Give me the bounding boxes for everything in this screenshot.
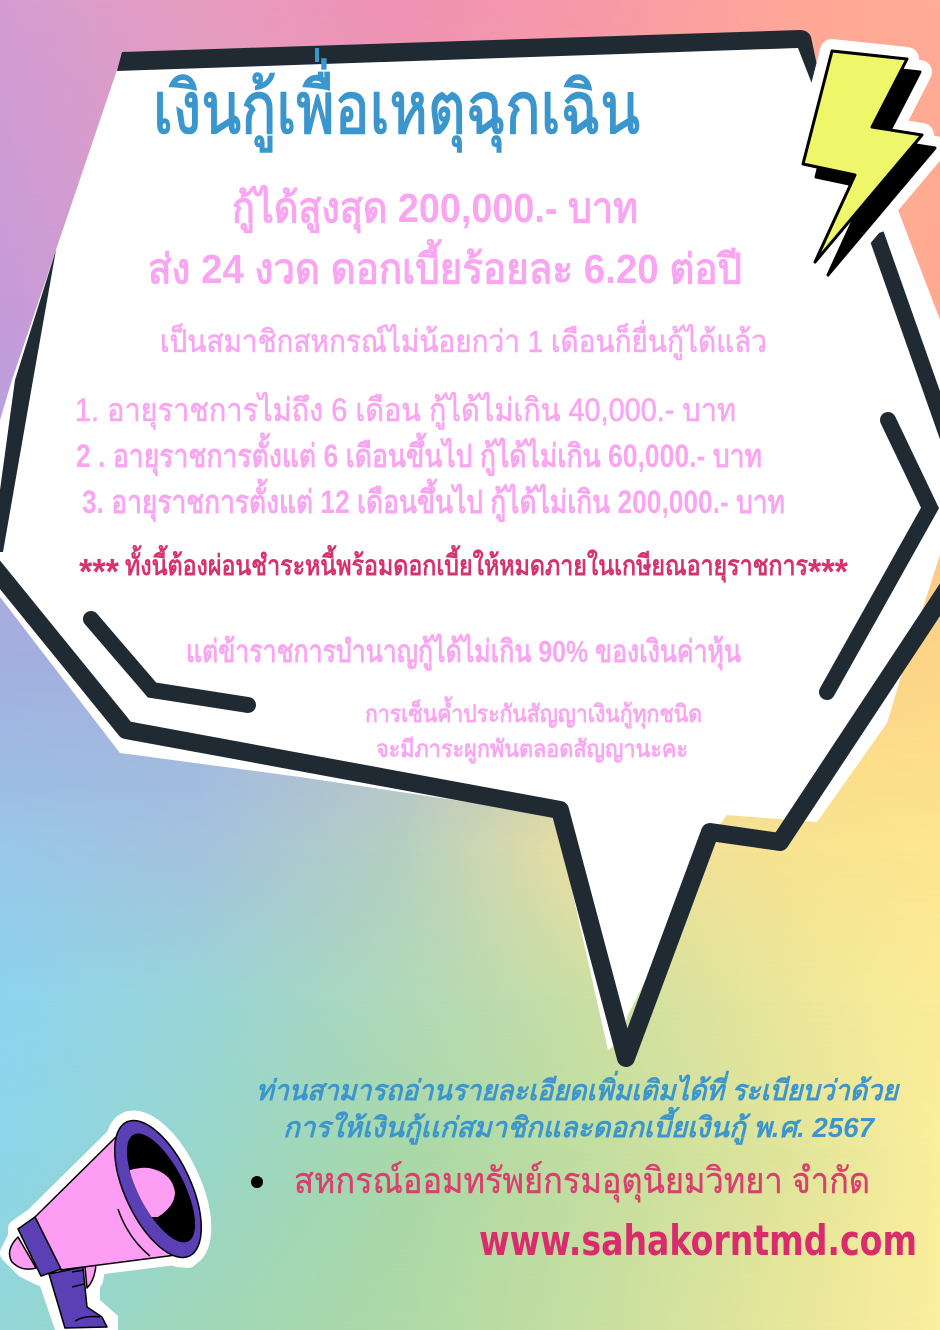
- regulation reference line 1: ท่านสามารถอ่านรายละเอียดเพิ่มเติมได้ที่ ระเบียบว่าด้วย: [256, 1070, 900, 1106]
- speech bubble white fill: [0, 42, 940, 1050]
- repayment warning: [79, 544, 848, 592]
- loan limit line: กู้ได้สูงสุด 200,000.- บาท: [232, 184, 638, 234]
- condition 3: 3. อายุราชการตั้งแต่ 12 เดือนขึ้นไป กู้ได้ไม่เกิน 200,000.- บาท: [82, 478, 785, 523]
- organisation name: สหกรณ์ออมทรัพย์กรมอุตุนิยมวิทยา จำกัด: [294, 1160, 870, 1203]
- icon: lightning bolt: [803, 51, 935, 275]
- repayment warning: ทั้งนี้ต้องผ่อนชำระหนี้พร้อมดอกเบี้ยให้หมดภายในเกษียณอายุราชการ: [125, 544, 808, 583]
- repayment warning: ***: [79, 551, 119, 592]
- condition 2: 2 . อายุราชการตั้งแต่ 6 เดือนขึ้นไป กู้ได้ไม่เกิน 60,000.- บาท: [76, 432, 762, 477]
- pensioner condition: แต่ข้าราชการบำนาญกู้ได้ไม่เกิน 90% ของเงินค่าหุ้น: [186, 633, 741, 671]
- regulation reference line 2: การให้เงินกู้เเก่สมาชิกและดอกเบี้ยเงินกู้ พ.ศ. 2567: [283, 1106, 875, 1145]
- guarantor note line 2: จะมีภาระผูกพันตลอดสัญญานะคะ: [376, 736, 688, 764]
- membership condition: เป็นสมาชิกสหกรณ์ไม่น้อยกว่า 1 เดือนก็ยื่นกู้ได้แล้ว: [160, 320, 767, 360]
- icon: megaphone: [10, 1108, 219, 1330]
- title: เงินกู้เพื่อเหตุฉุกเฉิน: [153, 59, 640, 152]
- title: [153, 48, 640, 152]
- installments and interest line: ส่ง 24 งวด ดอกเบี้ยร้อยละ 6.20 ต่อปี: [148, 239, 742, 292]
- bullet: [251, 1176, 263, 1188]
- inner left bracket stroke: [91, 619, 248, 705]
- condition 1: 1. อายุราชการไม่ถึง 6 เดือน กู้ได้ไม่เกิน 40,000.- บาท: [75, 392, 736, 430]
- speech bubble outline: [0, 30, 940, 1058]
- inner right bracket stroke: [827, 420, 930, 692]
- guarantor note line 1: การเซ็นค้ำประกันสัญญาเงินกู้ทุกชนิด: [365, 695, 702, 730]
- repayment warning: ***: [808, 551, 848, 592]
